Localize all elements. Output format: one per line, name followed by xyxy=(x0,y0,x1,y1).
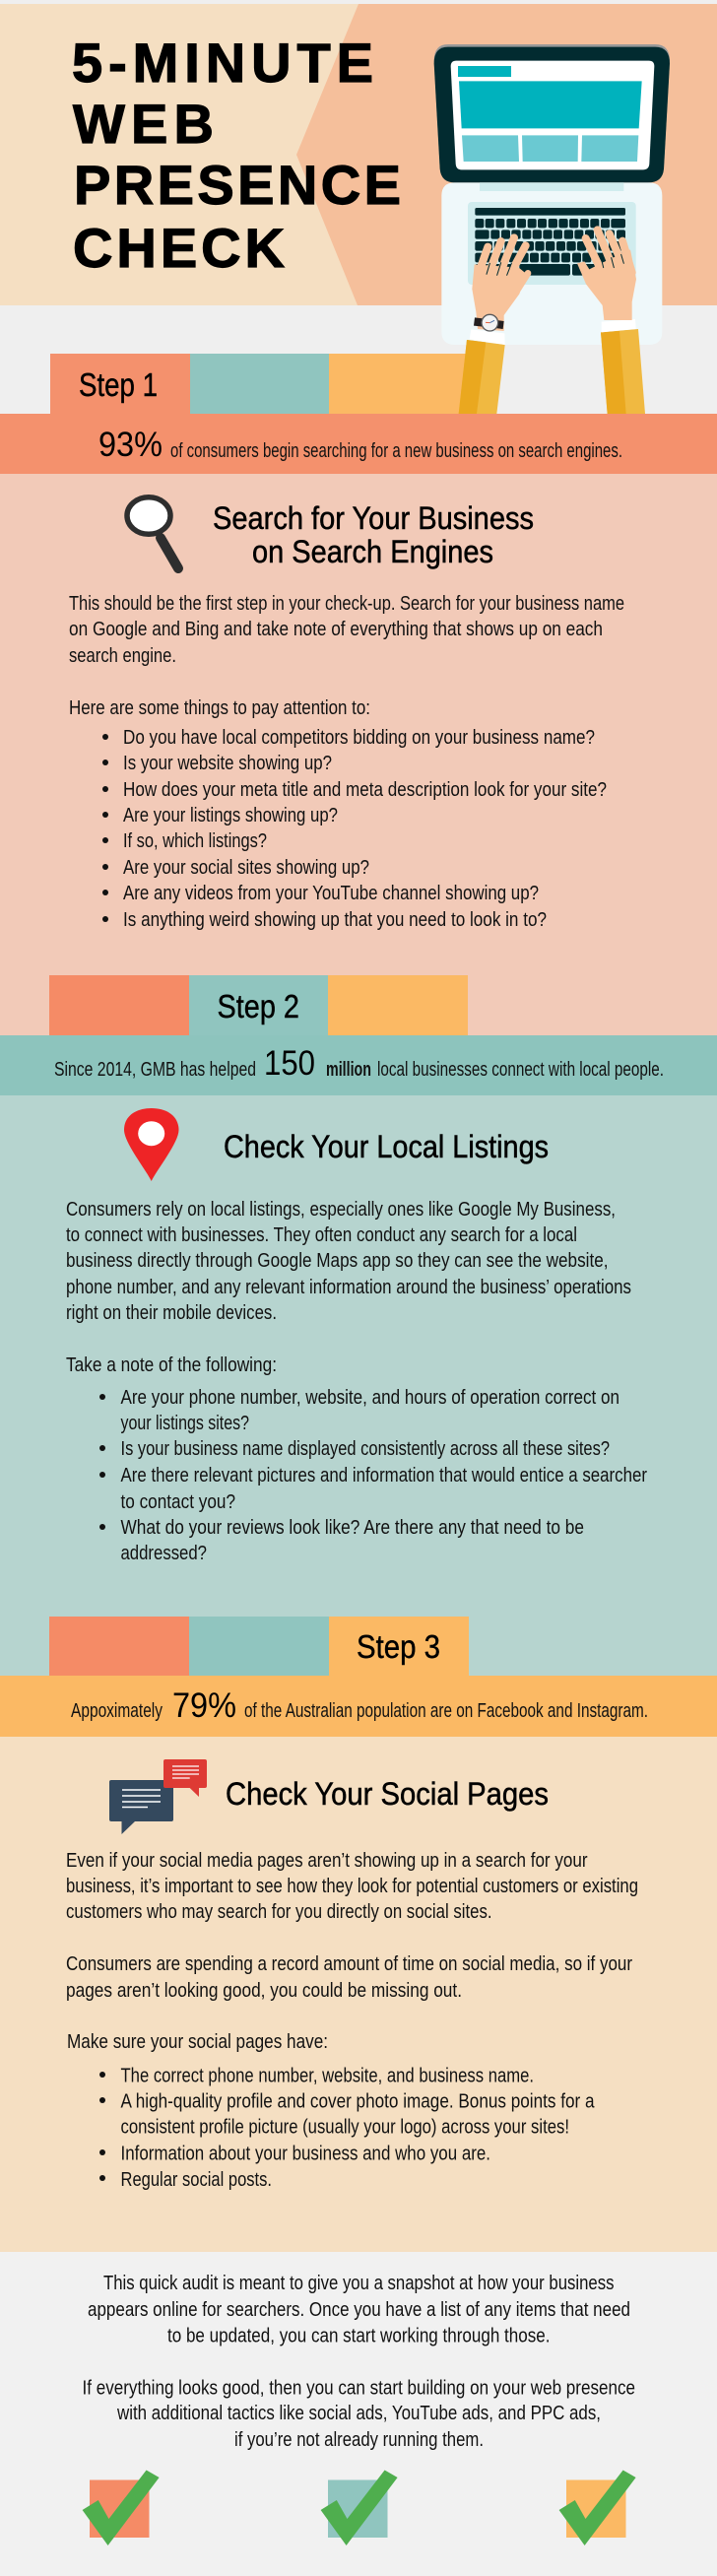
icon: magnifying glass xyxy=(127,497,178,568)
intro text: on Google and Bing and take note of everything that shows up on each xyxy=(69,619,603,640)
panel: closing footer xyxy=(0,2252,717,2576)
bullet list: If so, which listings? xyxy=(123,830,267,852)
bullet list: The correct phone number, website, and business name. xyxy=(120,2065,534,2086)
heading: check your local listings: Check Your Local Listings xyxy=(224,1129,549,1164)
title: PRESENCE xyxy=(74,154,401,216)
intro text: Even if your social media pages aren’t showing up in a search for your xyxy=(66,1850,588,1872)
bullet list: What do your reviews look like? Are there any that need to be xyxy=(120,1517,584,1539)
heading: search for your business xyxy=(213,500,534,569)
bullet list: Regular social posts. xyxy=(120,2169,272,2191)
icon: wristwatch xyxy=(474,314,504,331)
left hand xyxy=(472,237,528,331)
intro text: search engine. xyxy=(69,645,176,667)
bullet list: consistent profile picture (usually your logo) across your sites! xyxy=(120,2116,569,2138)
stat: million: million xyxy=(326,1059,371,1081)
bullet list: Are any videos from your YouTube channel showing up? xyxy=(123,883,539,904)
bullet list: to contact you? xyxy=(120,1491,235,1513)
stat band 3 xyxy=(0,1676,717,1737)
stat band 2 xyxy=(0,1035,717,1095)
bullet list: A high-quality profile and cover photo image. Bonus points for a xyxy=(120,2090,595,2112)
intro text xyxy=(66,1199,631,1376)
bullet list: Is anything weird showing up that you need to look in to? xyxy=(123,909,547,931)
bullet list: Is your website showing up? xyxy=(123,753,332,774)
intro text: phone number, and any relevant information around the business’ operations xyxy=(66,1277,631,1298)
icon: laptop with typing hands xyxy=(434,44,670,414)
step 1 label: Step 1 xyxy=(79,366,158,403)
step 1 tabs xyxy=(50,354,468,414)
closing text xyxy=(83,2273,635,2451)
icon: yellow check xyxy=(559,2471,636,2545)
bullet list: Are your listings showing up? xyxy=(123,805,338,826)
heading: search for your business: on Search Engines xyxy=(252,534,493,569)
heading: search for your business: Search for Your Business xyxy=(213,500,534,536)
closing text: with additional tactics like social ads, YouTube ads, and PPC ads, xyxy=(116,2403,601,2424)
stat: 150: 150 xyxy=(264,1044,315,1083)
icon: orange check xyxy=(83,2471,160,2545)
intro text: business directly through Google Maps app so they can see the website, xyxy=(66,1250,609,1272)
closing text: If everything looks good, then you can start building on your web presence xyxy=(83,2378,635,2400)
title: 5-MINUTE xyxy=(72,32,373,94)
stat band 1 xyxy=(0,414,717,474)
intro text: pages aren’t looking good, you could be missing out. xyxy=(66,1980,462,2002)
hero banner xyxy=(0,4,717,305)
step 2 tabs xyxy=(49,975,468,1035)
intro text: Make sure your social pages have: xyxy=(67,2031,328,2053)
bullet list: Are your phone number, website, and hours of operation correct on xyxy=(120,1387,619,1409)
intro text: Here are some things to pay attention to: xyxy=(69,697,370,719)
stat text 2 start: Since 2014, GMB has helped xyxy=(54,1059,256,1081)
bullet list: Is your business name displayed consistently across all these sites? xyxy=(120,1438,610,1460)
panel: check your local listings xyxy=(0,1095,717,1676)
stat: 79%: 79% xyxy=(172,1686,236,1725)
icon: map pin xyxy=(124,1108,179,1181)
icon: teal check xyxy=(321,2471,398,2545)
icon: chat bubbles xyxy=(109,1759,207,1834)
bullet list: addressed? xyxy=(120,1543,207,1564)
intro text xyxy=(69,593,624,719)
panel: check your social pages xyxy=(0,1737,717,2252)
stat: 93%: 93% xyxy=(98,426,163,464)
step 3 tabs xyxy=(49,1617,469,1676)
bullet list xyxy=(102,727,607,931)
stat text 3 start: Appoximately xyxy=(71,1700,163,1722)
sleeves and cuffs xyxy=(459,319,645,414)
right hand xyxy=(577,230,636,320)
bullet list xyxy=(99,2065,595,2191)
intro text: to connect with businesses. They often conduct any search for a local xyxy=(66,1224,577,1246)
step 3 label: Step 3 xyxy=(357,1628,440,1665)
bullet list: Information about your business and who you are. xyxy=(120,2144,490,2165)
intro text: Take a note of the following: xyxy=(66,1354,277,1376)
bullet list: your listings sites? xyxy=(120,1413,249,1434)
title: CHECK xyxy=(73,217,285,279)
bullet list: Are your social sites showing up? xyxy=(123,857,369,879)
bullet list: How does your meta title and meta description look for your site? xyxy=(123,779,607,801)
title: WEB xyxy=(73,93,214,155)
step 2 label: Step 2 xyxy=(217,988,299,1024)
bullet list: Do you have local competitors bidding on your business name? xyxy=(123,727,595,749)
bullet list xyxy=(99,1387,647,1564)
intro text: right on their mobile devices. xyxy=(66,1302,277,1324)
intro text: Consumers are spending a record amount of time on social media, so if your xyxy=(66,1953,632,1975)
closing text: appears online for searchers. Once you have a list of any items that need xyxy=(88,2299,630,2321)
intro text xyxy=(66,1850,638,2053)
title xyxy=(72,32,401,279)
intro text: customers who may search for you directly on social sites. xyxy=(66,1901,492,1923)
closing text: This quick audit is meant to give you a snapshot at how your business xyxy=(103,2273,615,2294)
heading: check your social pages: Check Your Social Pages xyxy=(226,1776,549,1812)
closing text: to be updated, you can start working through those. xyxy=(167,2325,550,2346)
intro text: Consumers rely on local listings, especially ones like Google My Business, xyxy=(66,1199,616,1221)
panel: search for your business xyxy=(0,474,717,1035)
closing text: if you’re not already running them. xyxy=(234,2429,484,2451)
